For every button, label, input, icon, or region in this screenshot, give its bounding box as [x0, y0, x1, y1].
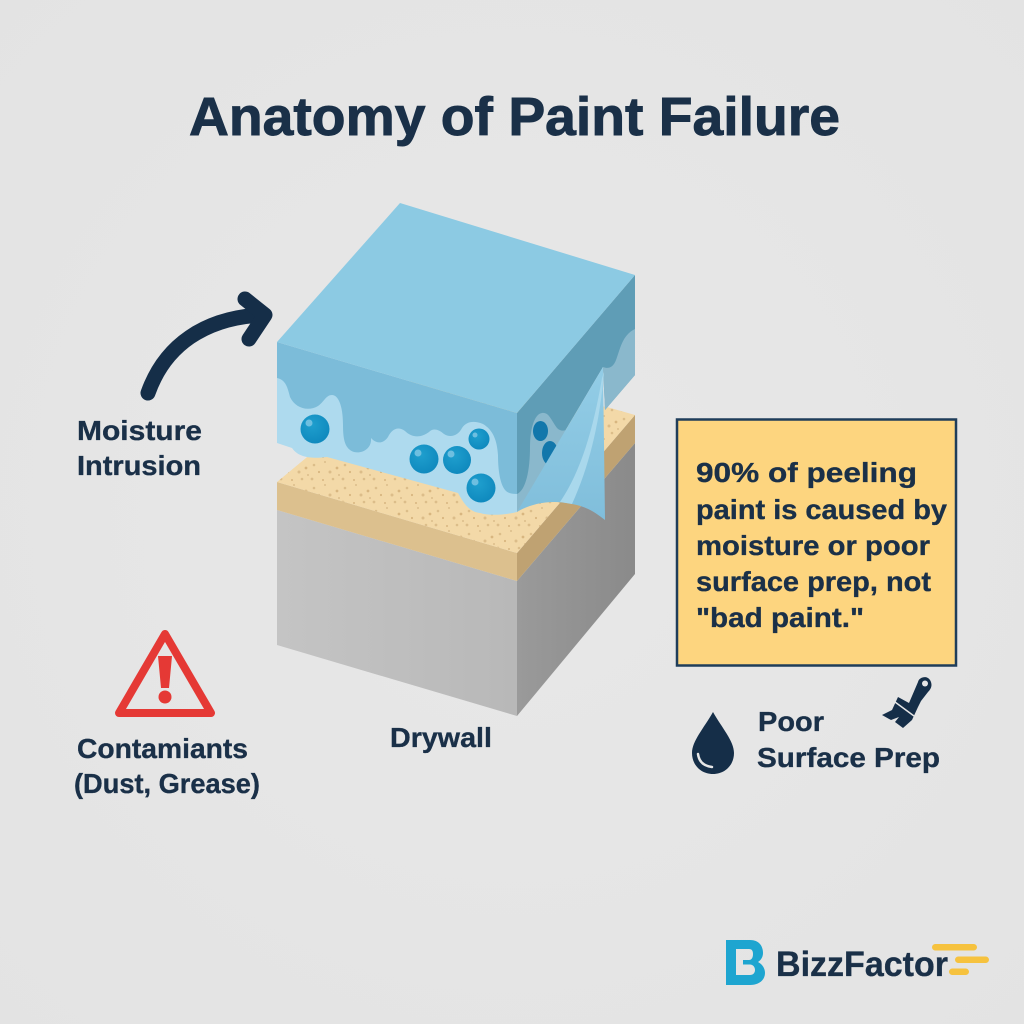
label: poor surface prep: Surface Prep: [757, 742, 940, 773]
bubbles: [300, 414, 496, 502]
primer sand layer: [277, 380, 635, 581]
callout: statistic: "bad paint.": [696, 602, 864, 633]
label: poor surface prep: Poor: [758, 706, 824, 737]
label: moisture intrusion: Intrusion: [77, 450, 201, 481]
logo mark: [726, 940, 765, 985]
peeling paint flap: [517, 367, 605, 520]
logo speed bars: [932, 944, 989, 975]
title: Anatomy of Paint Failure: [189, 87, 840, 147]
label: contaminants: Contamiants: [77, 733, 248, 764]
blister on right face: [517, 413, 572, 512]
callout: statistic: moisture or poor: [696, 530, 930, 561]
arrow: moisture direction: [148, 299, 265, 393]
label: contaminants: (Dust, Grease): [74, 768, 260, 799]
paint block right face: [517, 275, 635, 512]
label: drywall: Drywall: [390, 722, 492, 753]
logo wordmark: BizzFactor: [776, 945, 948, 984]
paint block front wet layer: [277, 378, 517, 515]
paint block top face: [277, 203, 635, 413]
callout: statistic: surface prep, not: [696, 566, 931, 597]
icon: paint brush: [882, 677, 931, 728]
layered block diagram: [277, 203, 635, 716]
callout: statistic: [677, 420, 956, 666]
label: moisture intrusion: [77, 415, 202, 481]
logo: BizzFactor: [726, 940, 989, 985]
label: moisture intrusion: Moisture: [77, 415, 202, 446]
callout: statistic: paint is caused by: [696, 494, 947, 525]
callout: statistic: 90% of peeling: [696, 457, 917, 488]
translucent patch on right face: [603, 329, 635, 410]
icon: warning triangle: [119, 634, 211, 713]
label: poor surface prep: [757, 706, 940, 773]
icon: water drop: [692, 712, 734, 774]
drywall layer: [277, 443, 635, 716]
label: contaminants: [74, 733, 260, 799]
paint drips: [277, 342, 517, 494]
